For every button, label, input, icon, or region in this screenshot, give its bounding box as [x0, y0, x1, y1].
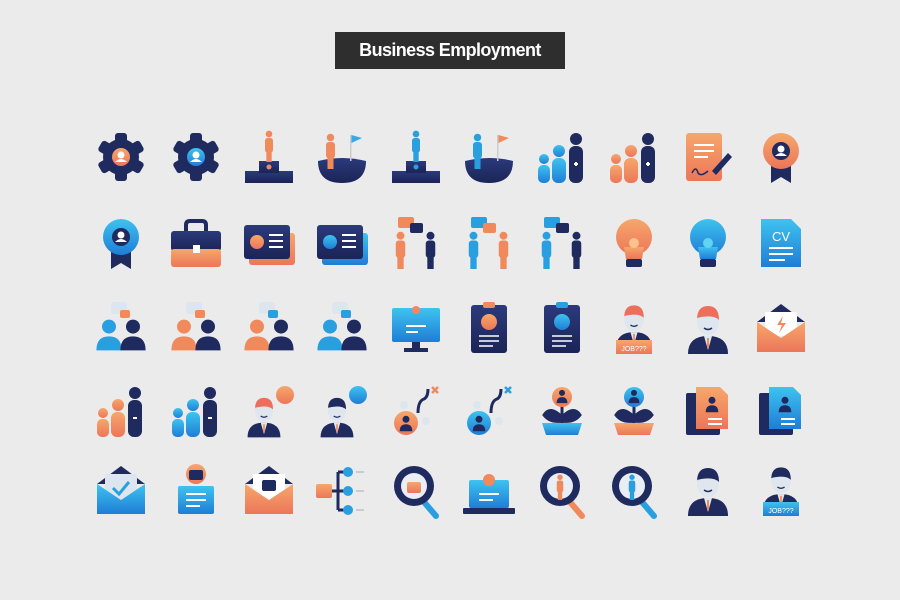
- icon: id card orange: [244, 225, 295, 265]
- icon: growth plant orange pot: [614, 387, 654, 435]
- icon: resume orange: [686, 387, 728, 435]
- icon: clipboard blue: [544, 302, 580, 353]
- row 4: [97, 386, 801, 437]
- icon: clipboard orange: [471, 302, 507, 353]
- icon: career path blue: [467, 387, 511, 435]
- title: [335, 32, 565, 69]
- icon: meeting orange-navy: [396, 217, 435, 269]
- icon: monitor: [392, 306, 440, 352]
- icon: handshake blue-navy blue bubble: [317, 302, 367, 350]
- icon: meeting blue-navy: [542, 217, 581, 269]
- icon: businessman: [688, 468, 728, 516]
- row 1: [97, 131, 799, 183]
- icon: search briefcase: [394, 466, 436, 516]
- icon: team decrease orange: [97, 387, 142, 437]
- icon: CV document: CV: [772, 229, 790, 244]
- icon: podium blue: [392, 131, 440, 183]
- icon: CV document: [761, 219, 801, 267]
- icon: person briefcase form: [178, 464, 214, 514]
- icon: envelope orange: [757, 304, 805, 352]
- icon: handshake orange-navy: [171, 302, 221, 350]
- icon: search person orange: [540, 466, 582, 516]
- icon: envelope check: [97, 466, 145, 514]
- icon: contract sign: [686, 133, 732, 181]
- icon: team blue: [538, 133, 583, 183]
- icon: woman speech: [248, 386, 294, 437]
- icon: bulb orange: [616, 219, 652, 267]
- icon: envelope briefcase: [245, 466, 293, 514]
- icon: id card blue: [317, 225, 368, 265]
- icon: award badge orange: [763, 133, 799, 183]
- icon: team orange: [610, 133, 655, 183]
- icon: process checklist: [316, 467, 364, 515]
- row 3: [96, 302, 805, 354]
- icon: gear blue user: [172, 133, 220, 181]
- icon: bulb blue: [690, 219, 726, 267]
- icon: award badge blue: [103, 219, 139, 269]
- icon: handshake blue-navy: [96, 302, 146, 350]
- icon: resume blue: [759, 387, 801, 435]
- icon: growth plant blue pot: [542, 387, 582, 435]
- icon: job seeker woman sign: JOB???: [621, 346, 647, 353]
- icon: job seeker woman sign: [616, 305, 652, 354]
- row 2: [103, 217, 801, 269]
- icon: island flag orange: [318, 134, 366, 183]
- icon: search person blue: [612, 466, 654, 516]
- icon: businessman job sign: JOB???: [768, 508, 794, 515]
- icon: meeting blue-orange: [469, 217, 508, 269]
- icon: career path orange: [394, 387, 438, 435]
- icon: woman employee: [688, 306, 728, 354]
- icon: island flag blue: [465, 134, 513, 183]
- icon: man speech: [321, 386, 367, 437]
- icon: handshake orange-navy blue bubble: [244, 302, 294, 350]
- title: Business Employment: [359, 40, 541, 60]
- row 5: [97, 464, 799, 516]
- icon: podium orange: [245, 131, 293, 183]
- icon: businessman job sign: [763, 467, 799, 516]
- icon: laptop: [463, 474, 515, 514]
- icon: briefcase: [171, 221, 221, 267]
- icon: gear orange user: [97, 133, 145, 181]
- icon: team decrease blue: [172, 387, 217, 437]
